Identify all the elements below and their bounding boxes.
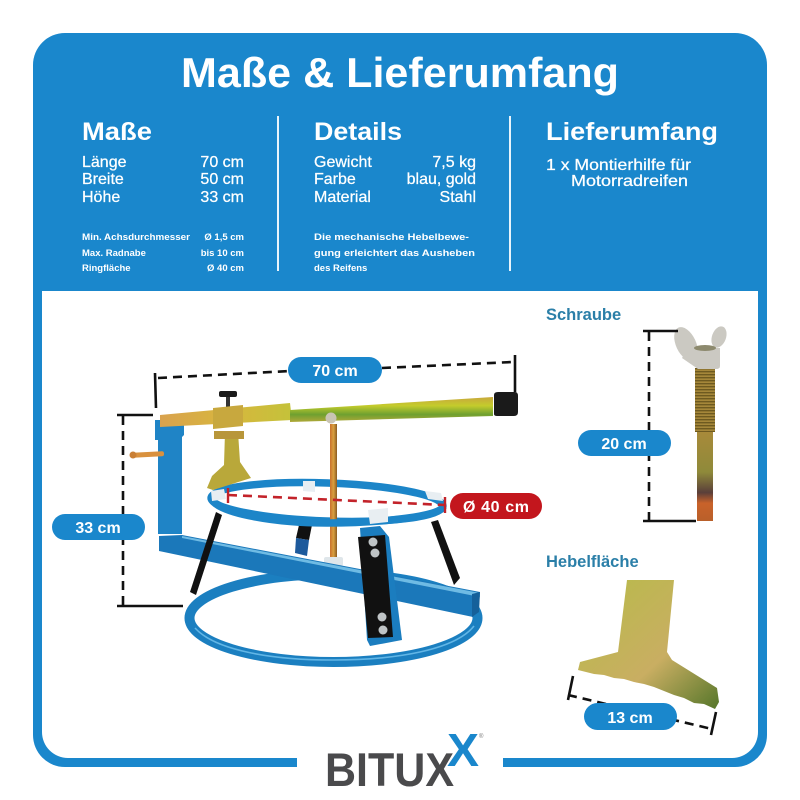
column: Maße: Min. Achsdurchmesser bbox=[82, 232, 190, 243]
top ring bbox=[210, 479, 444, 525]
column: Maße: 33 cm bbox=[200, 189, 244, 206]
column: Lieferumfang: Motorradreifen bbox=[571, 173, 688, 190]
column: Details: Stahl bbox=[440, 189, 476, 206]
lever arm bbox=[160, 403, 292, 427]
column: Maße: Breite bbox=[82, 171, 124, 188]
heading: Hebelfläche: Hebelfläche bbox=[546, 553, 639, 571]
bolt eye bbox=[326, 412, 336, 424]
33 cm dimension bbox=[52, 415, 183, 606]
column: Details: des Reifens bbox=[314, 263, 367, 274]
logo: BITUXX bbox=[325, 724, 484, 796]
screw photo bbox=[669, 323, 729, 521]
left leg bbox=[190, 512, 222, 595]
center bolt bbox=[330, 424, 337, 564]
40 cm diameter dimension: Ø 40 cm bbox=[463, 499, 529, 516]
13 cm dimension: 13 cm bbox=[607, 710, 653, 727]
vertical post bbox=[155, 420, 184, 534]
column: Maße: 70 cm bbox=[200, 154, 244, 171]
divider bbox=[277, 116, 279, 271]
beam highlight bbox=[182, 536, 480, 597]
13 cm dimension bbox=[568, 676, 716, 735]
column: Details: gung erleichtert das Ausheben bbox=[314, 248, 475, 259]
pin bbox=[130, 451, 164, 458]
lever face photo bbox=[578, 580, 719, 709]
registered mark: ® bbox=[479, 733, 484, 740]
column: Details: Material bbox=[314, 189, 371, 206]
70 cm dimension bbox=[155, 355, 515, 408]
beam end bbox=[472, 592, 480, 617]
bottom ring bbox=[190, 574, 478, 662]
logo gap in frame bbox=[297, 750, 503, 775]
shaft bbox=[697, 432, 713, 521]
ring tape bbox=[211, 481, 443, 524]
logo: BITUXX: BITUX bbox=[325, 743, 454, 796]
column: Details: Gewicht bbox=[314, 154, 372, 171]
column: Lieferumfang: 1 x Montierhilfe für bbox=[546, 157, 692, 174]
heading: Schraube: Schraube bbox=[546, 306, 621, 324]
column: Maße: Höhe bbox=[82, 189, 120, 206]
column: Maße: Ø 1,5 cm bbox=[204, 232, 244, 243]
column: Details: Die mechanische Hebelbewe- bbox=[314, 232, 469, 243]
40 cm diameter dimension bbox=[228, 488, 542, 519]
column: Maße: bis 10 cm bbox=[201, 248, 244, 259]
column: Maße bbox=[82, 118, 244, 274]
column: Details: Farbe bbox=[314, 171, 356, 188]
title: Maße & Lieferumfang bbox=[181, 49, 619, 96]
product photo: tire changer bbox=[52, 355, 542, 662]
column: Maße: Max. Radnabe bbox=[82, 248, 146, 259]
right leg bbox=[431, 520, 460, 585]
thread bbox=[695, 368, 715, 432]
rubber grip bbox=[494, 392, 518, 416]
front leg bbox=[358, 526, 402, 646]
top ring front arc bbox=[211, 498, 443, 523]
20 cm dimension bbox=[578, 331, 696, 521]
rear leg bbox=[295, 525, 312, 556]
column: Maße: Ø 40 cm bbox=[207, 263, 244, 274]
column: Maße: Länge bbox=[82, 154, 127, 171]
column: Maße: 50 cm bbox=[200, 171, 244, 188]
column: Details bbox=[314, 118, 476, 274]
white content panel bbox=[42, 291, 758, 758]
column: Details: Details bbox=[314, 118, 402, 146]
wing nut bbox=[669, 323, 729, 369]
column: Maße: Maße bbox=[82, 118, 152, 146]
divider bbox=[509, 116, 511, 271]
lever foot bbox=[207, 432, 251, 490]
column: Lieferumfang: Lieferumfang bbox=[546, 118, 718, 146]
column: Maße: Ringfläche bbox=[82, 263, 131, 274]
beam bbox=[159, 535, 480, 617]
logo blue X: X bbox=[447, 724, 479, 776]
lever tube bbox=[290, 397, 493, 422]
20 cm dimension: 20 cm bbox=[601, 436, 647, 453]
column: Lieferumfang bbox=[546, 118, 718, 190]
70 cm dimension: 70 cm bbox=[312, 363, 358, 380]
clamp and knob bbox=[213, 391, 244, 439]
33 cm dimension: 33 cm bbox=[75, 520, 121, 537]
bolt base bbox=[324, 557, 343, 566]
column: Details: blau, gold bbox=[407, 171, 476, 188]
column: Details: 7,5 kg bbox=[432, 154, 476, 171]
